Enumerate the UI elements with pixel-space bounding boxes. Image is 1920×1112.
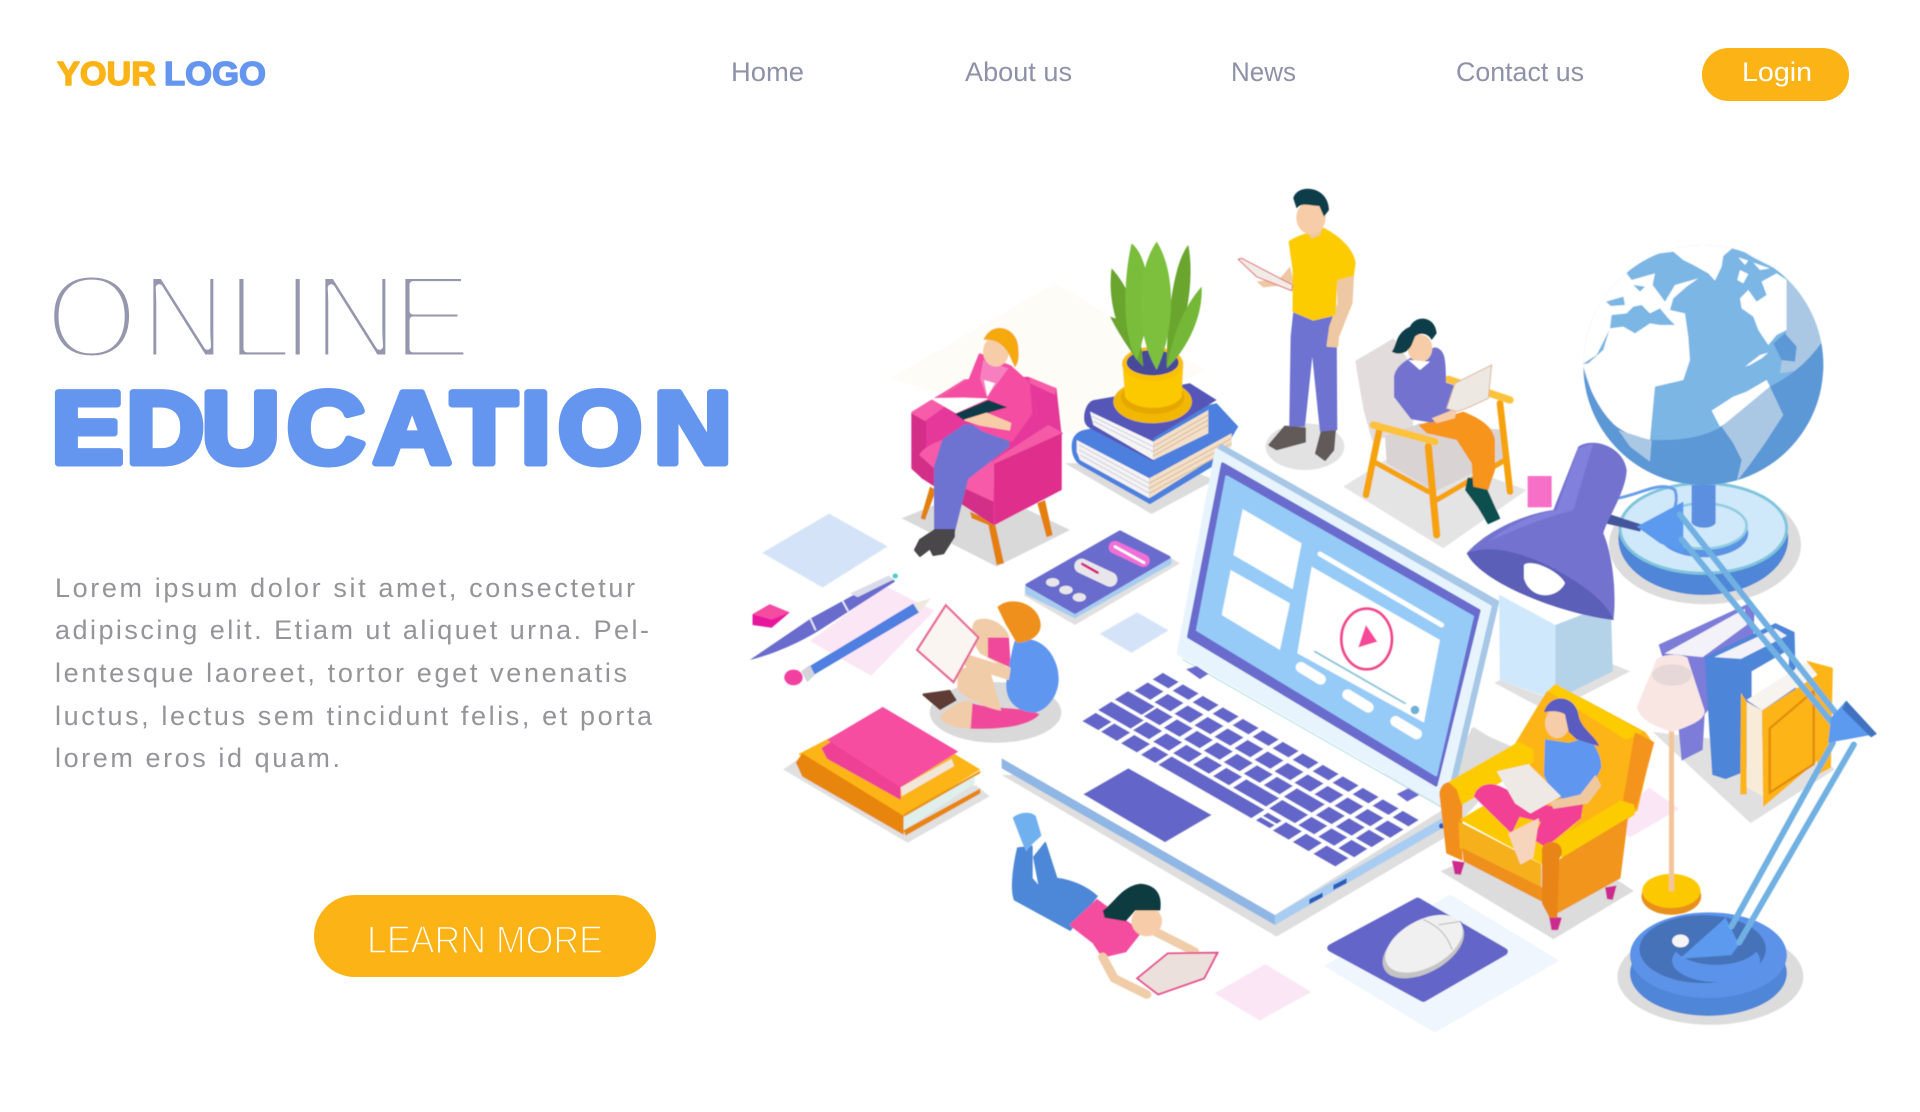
- standing man with book: [1238, 189, 1355, 470]
- login button: Login: [1742, 57, 1812, 87]
- learn more button: LEARN MORE: [367, 919, 603, 962]
- blue book: [1705, 623, 1796, 779]
- globe sphere: [1580, 243, 1833, 487]
- laptop base: [1002, 658, 1445, 925]
- navigation: News: [1231, 57, 1296, 87]
- plant leaves: [1110, 242, 1202, 370]
- wooden chair with reading woman: [1343, 319, 1552, 548]
- navigation: [731, 57, 1584, 87]
- laptop lid: [1178, 445, 1498, 805]
- body text: [55, 573, 653, 773]
- lamp arm joint: [1637, 502, 1683, 553]
- yellow book: [1740, 661, 1833, 807]
- desk lamp head: [1467, 443, 1683, 620]
- mouse pad and mouse: [1331, 902, 1504, 998]
- stationery: eraser, pen, pencil: [750, 574, 931, 685]
- logo: [57, 55, 266, 92]
- flower pot: [1113, 347, 1192, 423]
- navigation: Contact us: [1456, 57, 1584, 87]
- navigation: About us: [965, 57, 1072, 87]
- pencil: [784, 598, 931, 685]
- globe stand: [1609, 482, 1801, 604]
- woman in armchair: [915, 328, 1031, 556]
- body text: lentesque laoreet, tortor eget venenatis: [55, 658, 627, 688]
- book stack with potted plant: [1065, 242, 1238, 514]
- floor decor: pale diamonds: [762, 283, 1679, 1033]
- seated woman: [1392, 319, 1499, 523]
- lower book: [1072, 403, 1238, 504]
- play button: [1341, 609, 1392, 669]
- desk lamp arms and base: [1617, 514, 1877, 1025]
- logo: YOUR: [57, 55, 156, 92]
- body text: Lorem ipsum dolor sit amet, consectetur: [55, 573, 635, 603]
- tablet: [1023, 532, 1180, 625]
- pink armchair with reading woman: [902, 328, 1070, 567]
- body text: lorem eros id quam.: [55, 743, 340, 773]
- laptop screen content: [1222, 509, 1442, 734]
- learn more button: [314, 895, 656, 977]
- title: education: EDUCATION: [51, 372, 732, 485]
- laptop: [1002, 445, 1520, 937]
- keyboard: [1084, 674, 1414, 868]
- lamp elbow joint: [1828, 701, 1877, 743]
- logo: LOGO: [164, 55, 266, 92]
- body text: luctus, lectus sem tincidunt felis, et porta: [55, 701, 653, 731]
- floor lamp: [1637, 655, 1705, 915]
- standing books: [1653, 604, 1835, 823]
- computer mouse: [1371, 903, 1475, 991]
- usb ports: [1309, 823, 1444, 904]
- body text: adipiscing elit. Etiam ut aliquet urna. Pel-: [55, 615, 649, 645]
- pink cup: [1528, 476, 1552, 507]
- yellow armchair with reading woman: [1439, 684, 1653, 939]
- stacked books: orange and pink: [783, 707, 990, 843]
- title: online: ONLINE: [45, 250, 472, 384]
- purple book: [1659, 604, 1754, 761]
- navigation: Home: [731, 57, 804, 87]
- pen: [750, 574, 898, 660]
- globe on stand: [1580, 243, 1833, 604]
- eraser: [753, 604, 790, 628]
- cube pedestal under lamp: [1494, 595, 1630, 712]
- girl lying on floor with book: [1013, 813, 1218, 994]
- trackpad: [1083, 768, 1212, 842]
- boy reading on floor: [917, 601, 1061, 743]
- seated woman in yellow chair: [1475, 699, 1601, 863]
- isometric illustration: [750, 189, 1877, 1033]
- login button: [1702, 48, 1849, 101]
- upper book: [1084, 383, 1217, 462]
